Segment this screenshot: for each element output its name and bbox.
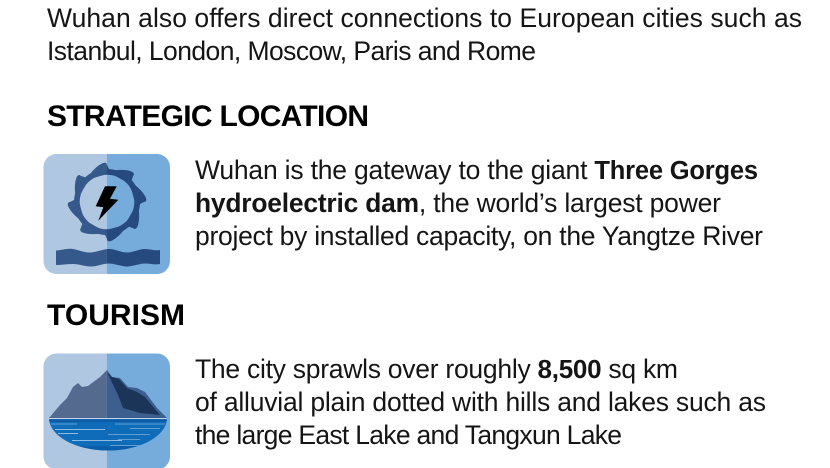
heading: strategic location: STRATEGIC LOCATION bbox=[47, 100, 369, 133]
text: strategic location: Wuhan is the gateway to the giant Three Gorges bbox=[195, 155, 758, 185]
text: strategic location: project by installed capacity, on the Yangtze River bbox=[195, 221, 763, 251]
icon: mountain and lake bbox=[44, 354, 170, 468]
text: tourism: of alluvial plain dotted with hills and lakes such as bbox=[195, 387, 766, 417]
text: tourism: The city sprawls over roughly 8,500 sq km bbox=[195, 354, 678, 384]
heading: tourism: TOURISM bbox=[47, 299, 185, 332]
text: strategic location: hydroelectric dam, the world’s largest power bbox=[195, 188, 721, 218]
intro text: Wuhan also offers direct connections to European cities such as bbox=[47, 3, 802, 33]
intro text: Istanbul, London, Moscow, Paris and Rome bbox=[47, 36, 536, 66]
intro text bbox=[47, 3, 802, 66]
text: tourism bbox=[195, 354, 766, 450]
text: tourism: the large East Lake and Tangxun Lake bbox=[195, 420, 622, 450]
text: strategic location bbox=[195, 155, 763, 251]
icon: hydroelectric gear and water bbox=[44, 154, 170, 274]
